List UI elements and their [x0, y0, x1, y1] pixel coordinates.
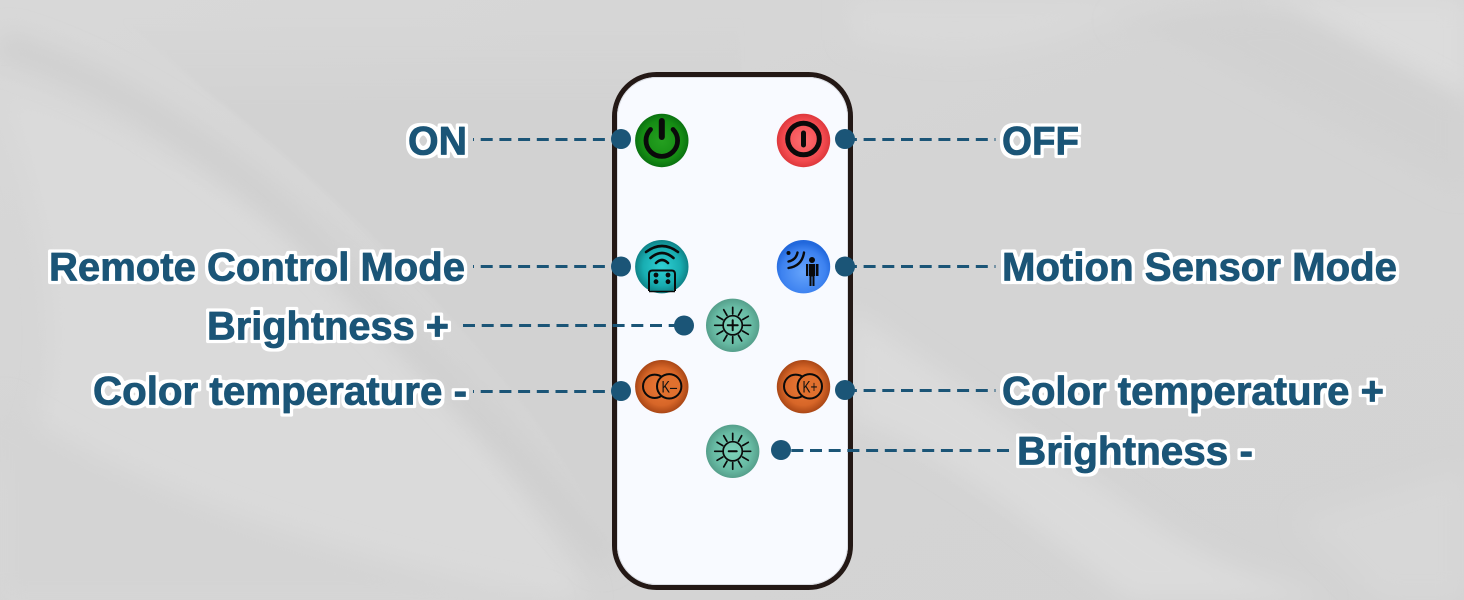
button: remote control mode [635, 240, 688, 293]
callout: Brightness -: Brightness - [1017, 430, 1253, 474]
callout: ON: ON [408, 120, 467, 164]
callout: Color temperature -: Color temperature - [93, 370, 467, 414]
button: power on [635, 114, 688, 167]
callout: Motion Sensor Mode: Motion Sensor Mode [1002, 246, 1397, 290]
callout: Color temperature - [93, 370, 631, 414]
callout: Brightness +: Brightness + [207, 304, 449, 348]
callout: OFF [835, 120, 1079, 164]
button: brightness minus [706, 425, 759, 478]
remote control body [614, 74, 850, 588]
callout: ON [408, 120, 631, 164]
callout: Color temperature +: Color temperature + [1002, 370, 1384, 414]
button: color temperature minus: K– [662, 378, 677, 397]
button: color temperature plus: K+ [802, 378, 818, 397]
callout: Brightness + [207, 304, 694, 348]
callout: Motion Sensor Mode [835, 246, 1397, 290]
callout: Color temperature + [835, 370, 1384, 414]
button: power off [777, 114, 830, 167]
callout: Brightness - [771, 430, 1253, 474]
button: color temperature plus [777, 360, 830, 413]
button: color temperature minus [635, 360, 688, 413]
callout: OFF: OFF [1002, 120, 1079, 164]
button: brightness plus [706, 299, 759, 352]
button: motion sensor mode [777, 240, 830, 293]
callout: Remote Control Mode: Remote Control Mode [49, 246, 465, 290]
